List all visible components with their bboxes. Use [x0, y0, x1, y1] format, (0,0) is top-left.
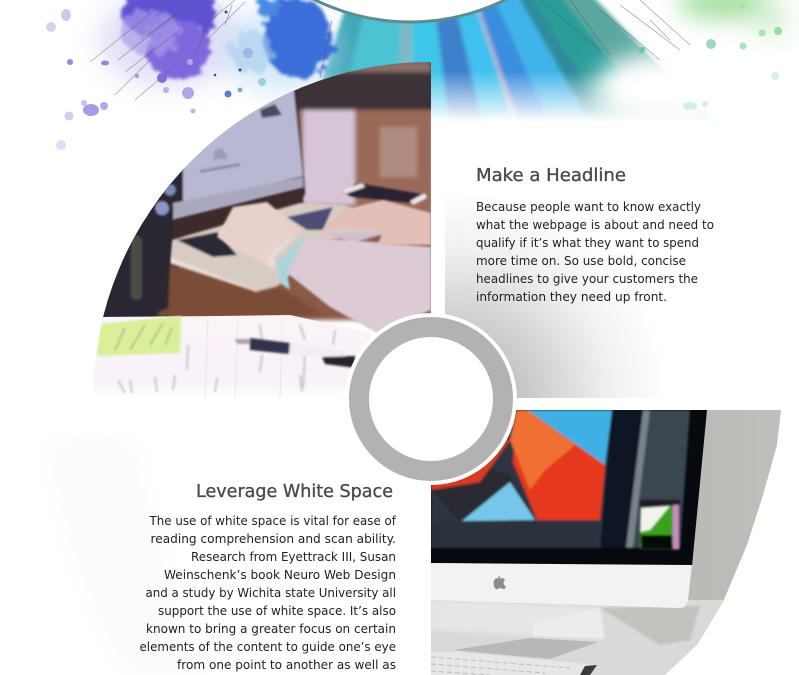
body copy: leverage white space: reading comprehension and scan ability. [150, 531, 396, 546]
text: leverage white space [140, 482, 397, 672]
heading: make a headline: Make a Headline [476, 166, 626, 186]
stand [453, 608, 604, 659]
dark area left of laptop [102, 167, 186, 321]
white fade over right rays [595, 52, 735, 124]
blue blob [230, 0, 332, 78]
apple logo [494, 576, 506, 589]
body copy: make a headline: what the webpage is about and need to [476, 217, 714, 232]
blue haze [220, 8, 340, 92]
body copy: leverage white space: known to bring a greater focus on certain [146, 621, 396, 636]
body copy: make a headline: information they need up front. [476, 289, 667, 304]
desk [431, 600, 724, 675]
body copy: leverage white space: and a study by Wichita state University all [146, 585, 396, 600]
panel: make a headline background [445, 122, 799, 398]
text: make a headline [476, 166, 714, 304]
photo: laptop on desk [93, 55, 435, 398]
monitor chin [431, 563, 692, 608]
body copy: make a headline: more time on. So use bold, concise [476, 253, 686, 268]
phone [343, 183, 427, 205]
paint splatter dots [46, 3, 782, 150]
body copy: leverage white space: from one point to another as well as [177, 657, 396, 672]
sleeve [287, 237, 431, 333]
heading: leverage white space: Leverage White Space [196, 482, 393, 502]
body copy: make a headline: headlines to give your customers the [476, 271, 698, 286]
paper and notes [93, 315, 372, 398]
cuff and watch [277, 233, 307, 290]
color picker [640, 500, 680, 550]
scribbled handwriting [115, 323, 335, 393]
hatch lines [90, 0, 690, 100]
wood table front [157, 264, 323, 318]
photo: iMac [431, 410, 781, 675]
photo wall and table [93, 60, 435, 320]
laptop base and keyboard [170, 203, 390, 293]
laptop screen [154, 90, 306, 221]
watercolor splash header [46, 0, 790, 150]
keyboard [431, 652, 597, 675]
wall [431, 410, 781, 640]
monitor bezel [431, 410, 707, 566]
coffee mug [118, 183, 178, 312]
body copy: make a headline [476, 199, 714, 304]
body copy: leverage white space: elements of the content to guide one’s eye [140, 639, 396, 654]
body copy: leverage white space: support the use of white space. It’s also [158, 603, 396, 618]
body copy: leverage white space [140, 513, 397, 672]
body copy: leverage white space: Research from Eyettrack III, Susan [191, 549, 396, 564]
hands [217, 200, 431, 263]
body copy: make a headline: Because people want to know exactly [476, 199, 702, 214]
screen contents [431, 410, 690, 548]
purple blob [120, 0, 220, 80]
pen [235, 338, 356, 368]
green blob [677, 0, 790, 38]
dark hinge and wood behind keyboard [172, 188, 303, 240]
body copy: leverage white space: The use of white space is vital for ease of [149, 513, 397, 528]
body copy: leverage white space: Weinschenk’s book Neuro Web Design [164, 567, 396, 582]
faint left panel shading [48, 440, 210, 675]
center ring [345, 313, 517, 485]
top circle edge [195, 0, 625, 22]
purple haze [98, 0, 242, 88]
body copy: make a headline: qualify if it’s what they want to spend [476, 235, 699, 250]
sticky note [97, 316, 181, 356]
radial colour rays [319, 0, 705, 120]
